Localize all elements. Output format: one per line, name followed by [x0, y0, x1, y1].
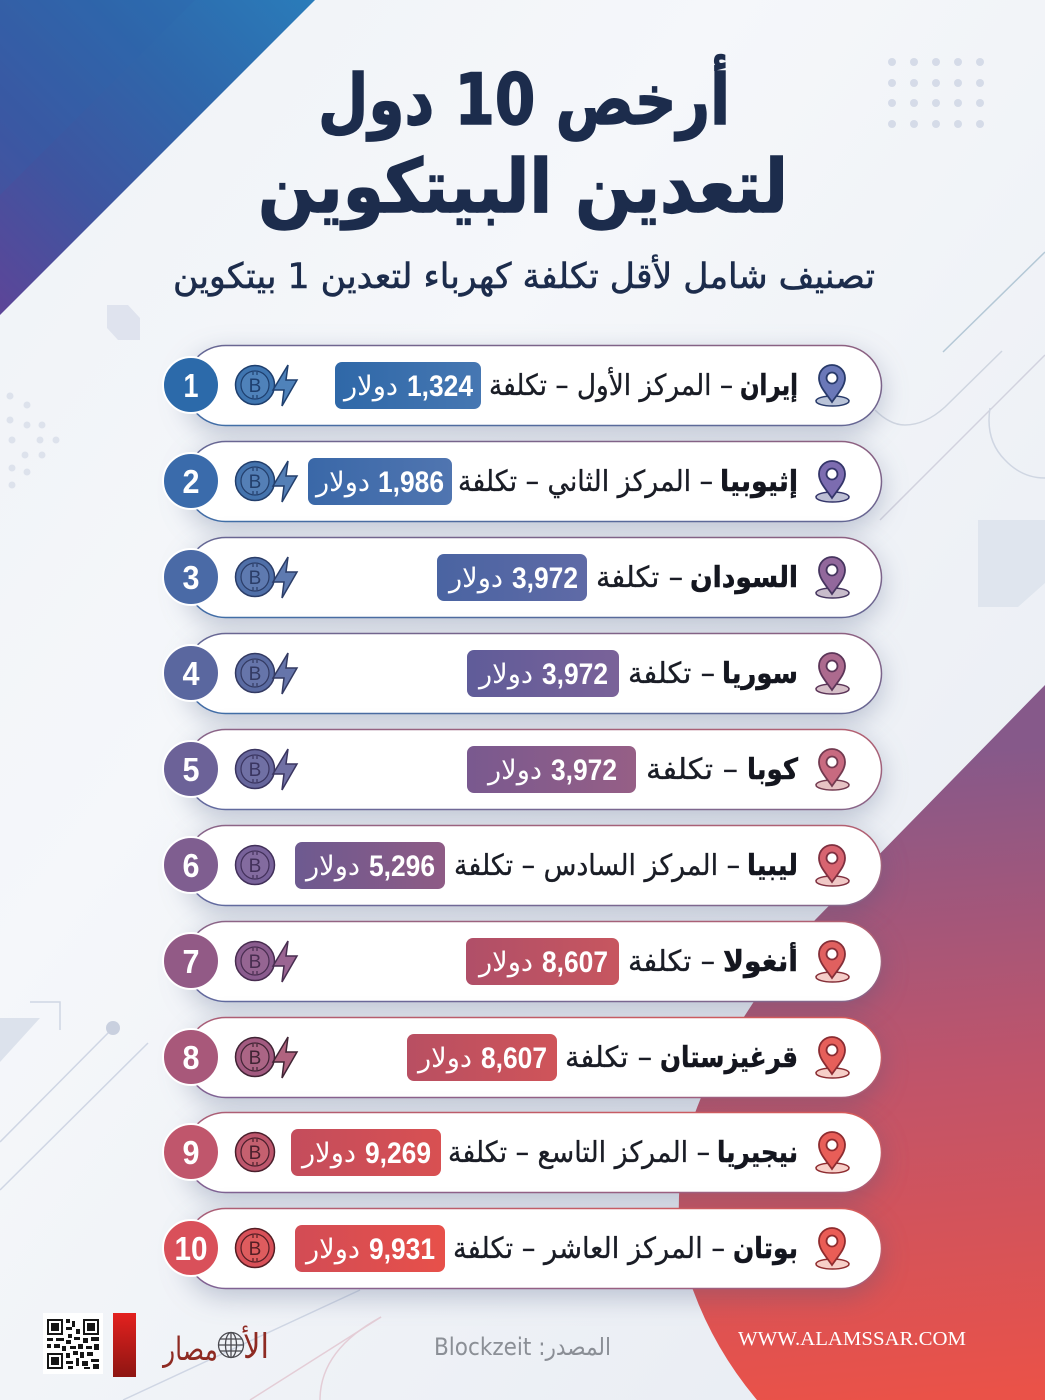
row text: [646, 752, 798, 786]
rank badge: [163, 453, 219, 509]
icon: bitcoin and bolt: B: [249, 1048, 261, 1069]
row 1: Iran: [163, 346, 882, 426]
icon: bitcoin and bolt: [236, 461, 297, 502]
row 5: Cuba: [163, 730, 882, 810]
icon: bitcoin and bolt: B: [249, 472, 261, 493]
row text: – المركز العاشر – تكلفة: [453, 1231, 725, 1265]
rank badge: 5: [182, 751, 200, 788]
decorative red corner: [679, 685, 1045, 1400]
rank badge: [163, 741, 219, 797]
icon: location pin: [816, 941, 849, 982]
row card: [186, 538, 882, 618]
cost pill: دولار: [477, 659, 533, 690]
cost pill: 8,607: [481, 1042, 547, 1075]
row text: – المركز السادس – تكلفة: [454, 848, 740, 882]
rank badge: [163, 933, 219, 989]
cost pill: [295, 1225, 445, 1272]
cost pill: 8,607: [542, 946, 608, 979]
icon: location pin: [816, 845, 849, 886]
row text: [565, 1040, 798, 1074]
cost pill: [335, 362, 481, 409]
rank badge: [163, 357, 219, 413]
row text: – تكلفة: [646, 752, 738, 786]
icon: location pin: [816, 749, 849, 790]
rank badge: 3: [182, 559, 200, 596]
rank badge: 6: [182, 847, 200, 884]
row text: – تكلفة: [628, 656, 715, 690]
row 7: Angola: [163, 922, 882, 1002]
row card: [186, 1018, 882, 1098]
cost pill: 9,931: [369, 1233, 435, 1266]
title line 2: لتعدين البيتكوين: [258, 144, 788, 231]
ranking list: [163, 346, 882, 1288]
decorative dots left: [6, 392, 60, 488]
row text: – المركز التاسع – تكلفة: [448, 1135, 710, 1169]
icon: bitcoin and bolt: [236, 365, 297, 406]
rank badge: 10: [174, 1230, 208, 1267]
icon: location pin: [816, 653, 849, 694]
row card: [186, 442, 882, 522]
icon: bitcoin and bolt: B: [249, 376, 261, 397]
cost pill: دولار: [300, 1138, 356, 1169]
row 10: Bhutan: [163, 1208, 882, 1288]
cost pill: دولار: [447, 563, 503, 594]
cost pill: 3,972: [542, 658, 608, 691]
icon: location pin: [816, 1132, 849, 1173]
row text: قرغيزستان: [660, 1040, 798, 1074]
icon: bitcoin: B: [249, 1239, 261, 1260]
rank badge: 2: [182, 463, 200, 500]
red bar: [113, 1313, 136, 1377]
icon: bitcoin and bolt: [236, 749, 297, 790]
row card: [186, 730, 882, 810]
rank badge: 4: [182, 655, 200, 692]
logo: Al Amssar: [161, 1325, 269, 1368]
row 6: Libya: [163, 826, 882, 906]
row text: – تكلفة: [565, 1040, 652, 1074]
row text: [628, 656, 798, 690]
cost pill: [308, 458, 452, 505]
logo: Al Amssar: الأ: [242, 1325, 269, 1367]
cost pill: 1,324: [407, 370, 473, 403]
row text: [628, 942, 798, 978]
row text: ليبيا: [747, 848, 798, 882]
cost pill: [466, 938, 619, 985]
logo: Al Amssar: مصار: [161, 1330, 218, 1368]
icon: location pin: [816, 557, 849, 598]
QR code: [43, 1313, 103, 1374]
cost pill: 1,986: [378, 466, 444, 499]
subtitle: تصنيف شامل لأقل تكلفة كهرباء لتعدين 1 بيتكوين: [173, 254, 875, 297]
rank badge: [163, 645, 219, 701]
source: المصدر: Blockzeit: [434, 1333, 611, 1361]
cost pill: 5,296: [369, 850, 435, 883]
cost pill: دولار: [304, 851, 360, 882]
icon: location pin: [816, 1228, 849, 1269]
rank badge: [163, 1220, 219, 1276]
cost pill: دولار: [416, 1043, 472, 1074]
row card: [186, 346, 882, 426]
cost pill: 9,269: [365, 1137, 431, 1170]
icon: bitcoin: B: [249, 856, 261, 877]
row text: بوتان: [733, 1231, 798, 1265]
cost pill: دولار: [342, 371, 398, 402]
cost pill: [291, 1129, 441, 1176]
row 4: Syria: [163, 634, 882, 714]
decorative blue corner: [0, 0, 315, 315]
row 3: Sudan: [163, 538, 882, 618]
title line 1: أرخص 10 دول: [318, 54, 730, 142]
row 8: Kyrgyzstan: [163, 1018, 882, 1098]
row card: [186, 826, 882, 906]
cost pill: دولار: [314, 467, 370, 498]
row text: كوبا: [747, 752, 798, 786]
rank badge: [163, 837, 219, 893]
icon: bitcoin and bolt: [236, 653, 297, 694]
icon: bitcoin: B: [249, 1143, 261, 1164]
row text: [596, 560, 798, 594]
row card: [186, 634, 882, 714]
icon: location pin: [816, 365, 849, 406]
title: [258, 54, 788, 231]
row card: [186, 922, 882, 1002]
rank badge: [163, 549, 219, 605]
row card: [186, 1112, 882, 1192]
rank badge: [163, 1124, 219, 1180]
icon: bitcoin: [236, 1228, 274, 1268]
icon: bitcoin and bolt: B: [249, 568, 261, 589]
icon: bitcoin and bolt: B: [249, 760, 261, 781]
icon: bitcoin: [236, 1132, 274, 1172]
rank badge: 8: [182, 1039, 200, 1076]
cost pill: دولار: [477, 947, 533, 978]
icon: globe: [218, 1332, 244, 1358]
cost pill: دولار: [304, 1234, 360, 1265]
row text: – المركز الثاني – تكلفة: [458, 464, 713, 499]
cost pill: [467, 746, 636, 793]
icon: bitcoin: [236, 846, 274, 884]
row card: [186, 1208, 882, 1288]
decorative dots top right: [888, 58, 984, 128]
rank badge: 9: [182, 1134, 200, 1171]
website: WWW.ALAMSSAR.COM: [738, 1328, 966, 1350]
rank badge: 1: [184, 367, 198, 404]
row text: السودان: [690, 560, 798, 594]
rank badge: 7: [182, 943, 200, 980]
rank badge: [163, 1029, 219, 1085]
row text: نيجيريا: [717, 1135, 798, 1169]
icon: bitcoin and bolt: [236, 557, 297, 598]
row 2: Ethiopia: [163, 442, 882, 522]
cost pill: دولار: [486, 755, 542, 786]
cost pill: [407, 1034, 557, 1081]
icon: bitcoin and bolt: B: [249, 664, 261, 685]
cost pill: [467, 650, 619, 697]
row text: سوريا: [722, 656, 798, 690]
cost pill: 3,972: [551, 754, 617, 787]
row text: أنغولا: [723, 942, 798, 978]
cost pill: [295, 842, 445, 889]
row text: – تكلفة: [596, 560, 683, 594]
row 9: Nigeria: [163, 1112, 882, 1192]
icon: bitcoin and bolt: [236, 1037, 297, 1078]
icon: location pin: [816, 1037, 849, 1078]
icon: bitcoin and bolt: B: [249, 952, 261, 973]
cost pill: 3,972: [512, 562, 578, 595]
cost pill: [437, 554, 587, 601]
row text: إيران: [740, 368, 798, 403]
row text: – المركز الأول – تكلفة: [489, 366, 733, 402]
icon: location pin: [816, 461, 849, 502]
icon: bitcoin and bolt: [236, 941, 297, 982]
row text: – تكلفة: [628, 944, 715, 978]
row text: إثيوبيا: [720, 464, 798, 499]
